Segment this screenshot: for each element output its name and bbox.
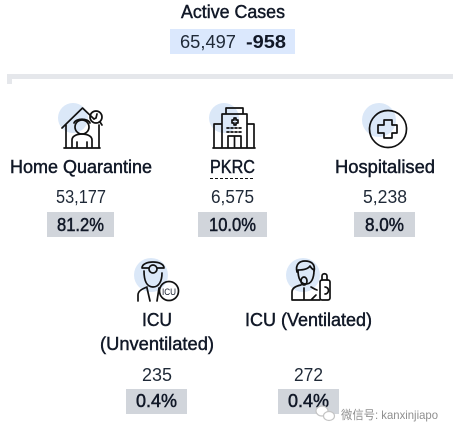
panel: hospitalised	[335, 103, 435, 237]
panel: PKRC	[198, 103, 267, 237]
percentage badge	[278, 389, 339, 414]
label: Hospitalised	[335, 157, 435, 177]
icon: wechat bubbles	[316, 406, 334, 420]
count: 5,238	[363, 187, 407, 207]
panel: ICU ventilated	[245, 258, 372, 414]
icon: ventilated patient with oxygen tank	[286, 258, 330, 300]
percentage badge: 0.4%	[288, 391, 329, 411]
icon: hospital building	[209, 103, 255, 148]
label: PKRC	[210, 157, 255, 177]
icon: doctor with ICU badge	[134, 258, 178, 301]
watermark: 微信号: kanxinjiapo	[341, 408, 438, 422]
percentage badge: 81.2%	[57, 215, 104, 235]
percentage badge: 10.0%	[209, 215, 256, 235]
panel: ICU unventilated: (Unventilated)	[100, 334, 214, 354]
percentage badge: 0.4%	[136, 391, 177, 411]
total active cases badge: -958	[246, 32, 286, 52]
total active cases badge: 65,497	[180, 32, 236, 52]
count: 53,177	[56, 187, 106, 207]
count: 6,575	[211, 187, 254, 207]
icon: doctor with ICU badge: ICU	[162, 287, 176, 298]
label: Home Quarantine	[10, 157, 152, 177]
watermark	[316, 406, 438, 422]
dashed underline	[210, 178, 255, 180]
count: 272	[294, 365, 323, 385]
label: ICU	[142, 310, 172, 330]
percentage badge: 8.0%	[365, 215, 404, 235]
percentage badge	[47, 212, 114, 237]
label: ICU (Ventilated)	[245, 310, 372, 330]
bracket divider	[7, 74, 453, 84]
percentage badge	[126, 389, 187, 414]
total active cases badge	[170, 29, 295, 54]
icon: house with person and clock	[58, 103, 102, 148]
count: 235	[142, 365, 172, 385]
title: Active Cases	[181, 2, 285, 22]
panel: ICU unventilated	[100, 258, 214, 414]
icon: medical cross	[362, 103, 406, 148]
panel: home quarantine	[10, 103, 152, 237]
